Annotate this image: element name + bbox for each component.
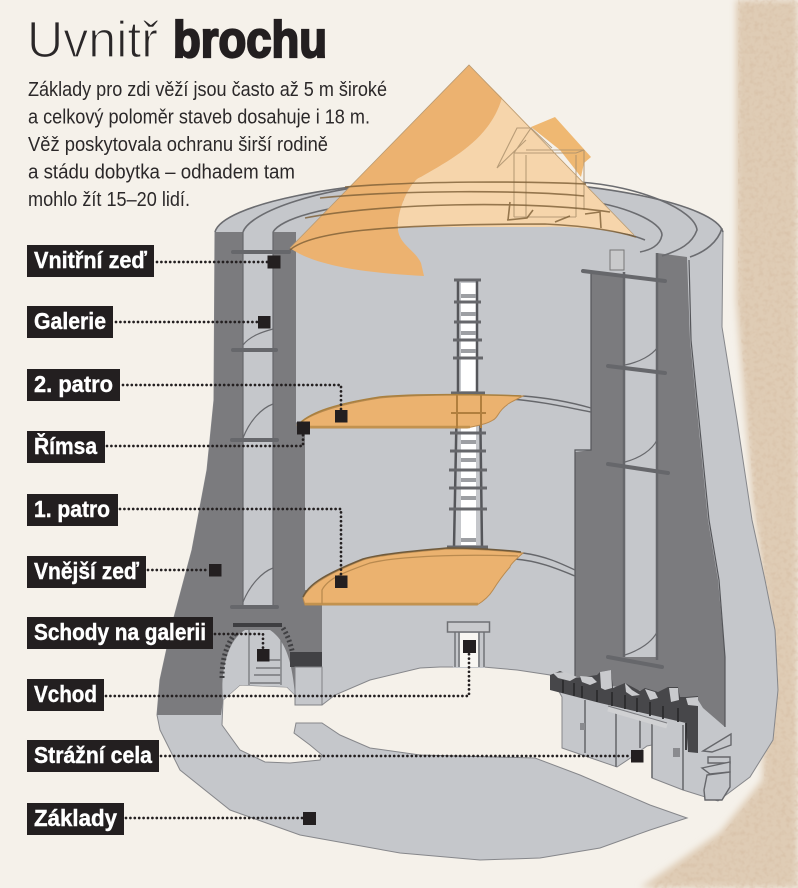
label: Vnější zeď: Vnější zeď: [34, 558, 139, 584]
guard cell and battlement: [550, 670, 698, 790]
marker squares: [209, 256, 644, 825]
left gallery: [243, 226, 273, 607]
label: Strážní cela: Strážní cela: [34, 742, 152, 768]
label: Základy: Základy: [34, 805, 117, 831]
central window ladder column: [447, 280, 488, 547]
intro text block: Věž poskytovala ochranu širší rodině: [28, 134, 328, 156]
galleries' stair curves: [243, 329, 657, 655]
intro text block: a stádu dobytka – odhadem tam: [28, 162, 295, 184]
background: aged paper: [641, 0, 798, 888]
intro text block: a celkový poloměr staveb dosahuje i 18 m.: [28, 106, 370, 128]
roof cone, pale section: [398, 98, 634, 235]
tower body and foundations: [157, 180, 778, 860]
intro text block: Základy pro zdi věží jsou často až 5 m široké: [28, 79, 387, 101]
intro text block: mohlo žít 15–20 lidí.: [28, 189, 190, 211]
label: Schody na galerii: Schody na galerii: [34, 619, 206, 645]
label: Galerie: Galerie: [34, 308, 106, 334]
second floor, orange: [297, 395, 523, 428]
gallery floor slabs: [232, 252, 668, 667]
label: Vnitřní zeď: Vnitřní zeď: [34, 247, 147, 273]
title: brochu: [173, 11, 327, 68]
small exterior stairs: [702, 734, 731, 800]
leader lines: [106, 262, 631, 818]
roof thin outline: [290, 65, 634, 248]
first floor, orange: [303, 548, 523, 605]
stairs archway: [222, 625, 322, 705]
label: 1. patro: 1. patro: [34, 496, 110, 522]
small orange roof behind: [531, 117, 591, 177]
title: [27, 11, 327, 68]
wall top rim arcs: [215, 180, 723, 257]
upper floor side lines: [510, 396, 591, 576]
roof cone, orange section: [290, 65, 502, 276]
left wall section: [157, 232, 322, 715]
label: Římsa: Římsa: [34, 432, 97, 459]
title: Uvnitř: [27, 11, 159, 68]
label: Vchod: Vchod: [34, 681, 97, 707]
main entrance door: [448, 622, 490, 668]
house wireframe: [497, 128, 584, 217]
label: 2. patro: 2. patro: [34, 371, 113, 397]
broch tower cutaway diagram: [157, 65, 778, 860]
ladder seen through second floor: [451, 395, 486, 428]
slab block: [610, 250, 624, 270]
right gallery: [623, 240, 657, 657]
right wall section: [550, 253, 725, 727]
intro text block: [28, 79, 387, 211]
rim lines through roof: [290, 182, 636, 250]
